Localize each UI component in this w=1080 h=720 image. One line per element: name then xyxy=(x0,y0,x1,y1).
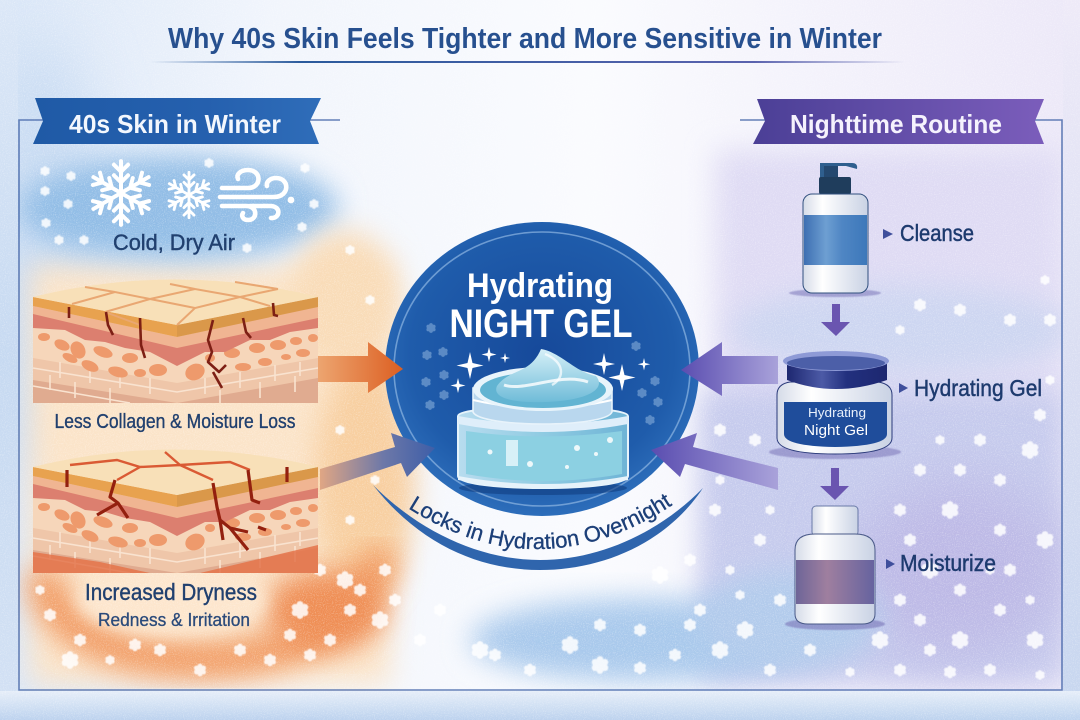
icon: gel jar xyxy=(458,349,628,495)
arrow: orange into badge xyxy=(318,342,403,393)
badge heading: NIGHT GEL xyxy=(450,302,632,346)
label: increased dryness: Redness & Irritation xyxy=(98,610,250,630)
icon: large snowflake xyxy=(90,161,152,225)
heading: right ribbon: Nighttime Routine xyxy=(790,109,1002,139)
arrow: purple into badge xyxy=(681,342,778,396)
caption arc: locks in hydration: Locks in Hydration Overnight xyxy=(409,494,673,552)
caption arc: locks in hydration xyxy=(373,485,703,570)
heading: left ribbon xyxy=(33,98,321,144)
jar label text: Night Gel xyxy=(804,422,868,439)
icon: cold dry air xyxy=(40,158,319,253)
sparkles xyxy=(450,347,650,393)
label: cleanse: Cleanse xyxy=(900,220,974,246)
badge heading: Hydrating xyxy=(467,267,613,305)
illustration: skin cross-section 1 xyxy=(33,280,318,403)
title: Why 40s Skin Feels Tighter and More Sensitive in Winter xyxy=(168,23,882,55)
panel frame: outer border xyxy=(19,120,1062,690)
product: cleanse bottle xyxy=(789,163,881,297)
label: hydrating gel: Hydrating Gel xyxy=(914,375,1042,401)
product: moisturize bottle xyxy=(785,506,885,630)
label: increased dryness: Increased Dryness xyxy=(85,579,257,605)
heading: left ribbon: 40s Skin in Winter xyxy=(69,109,281,139)
label: cold dry air: Cold, Dry Air xyxy=(113,230,235,255)
arrow: step down 2 xyxy=(820,468,849,500)
jar label text: Hydrating xyxy=(808,405,866,420)
label: moisturize: Moisturize xyxy=(900,550,996,576)
arrow: violet into badge xyxy=(651,433,778,490)
center badge: hydrating night gel xyxy=(385,222,699,516)
arrow: step down 1 xyxy=(821,304,850,336)
icon: wind xyxy=(220,170,286,220)
heading: right ribbon xyxy=(753,99,1044,144)
product: hydrating gel jar xyxy=(769,351,901,459)
icon: small snowflake xyxy=(167,172,211,218)
label: collagen: Less Collagen & Moisture Loss xyxy=(54,411,296,433)
illustration: skin cross-section 2 xyxy=(33,450,318,573)
arrow: blue into badge xyxy=(320,433,435,490)
jar label text xyxy=(804,405,868,439)
label: increased dryness xyxy=(85,579,257,630)
snow scatter xyxy=(35,245,1056,680)
badge heading xyxy=(450,267,632,346)
